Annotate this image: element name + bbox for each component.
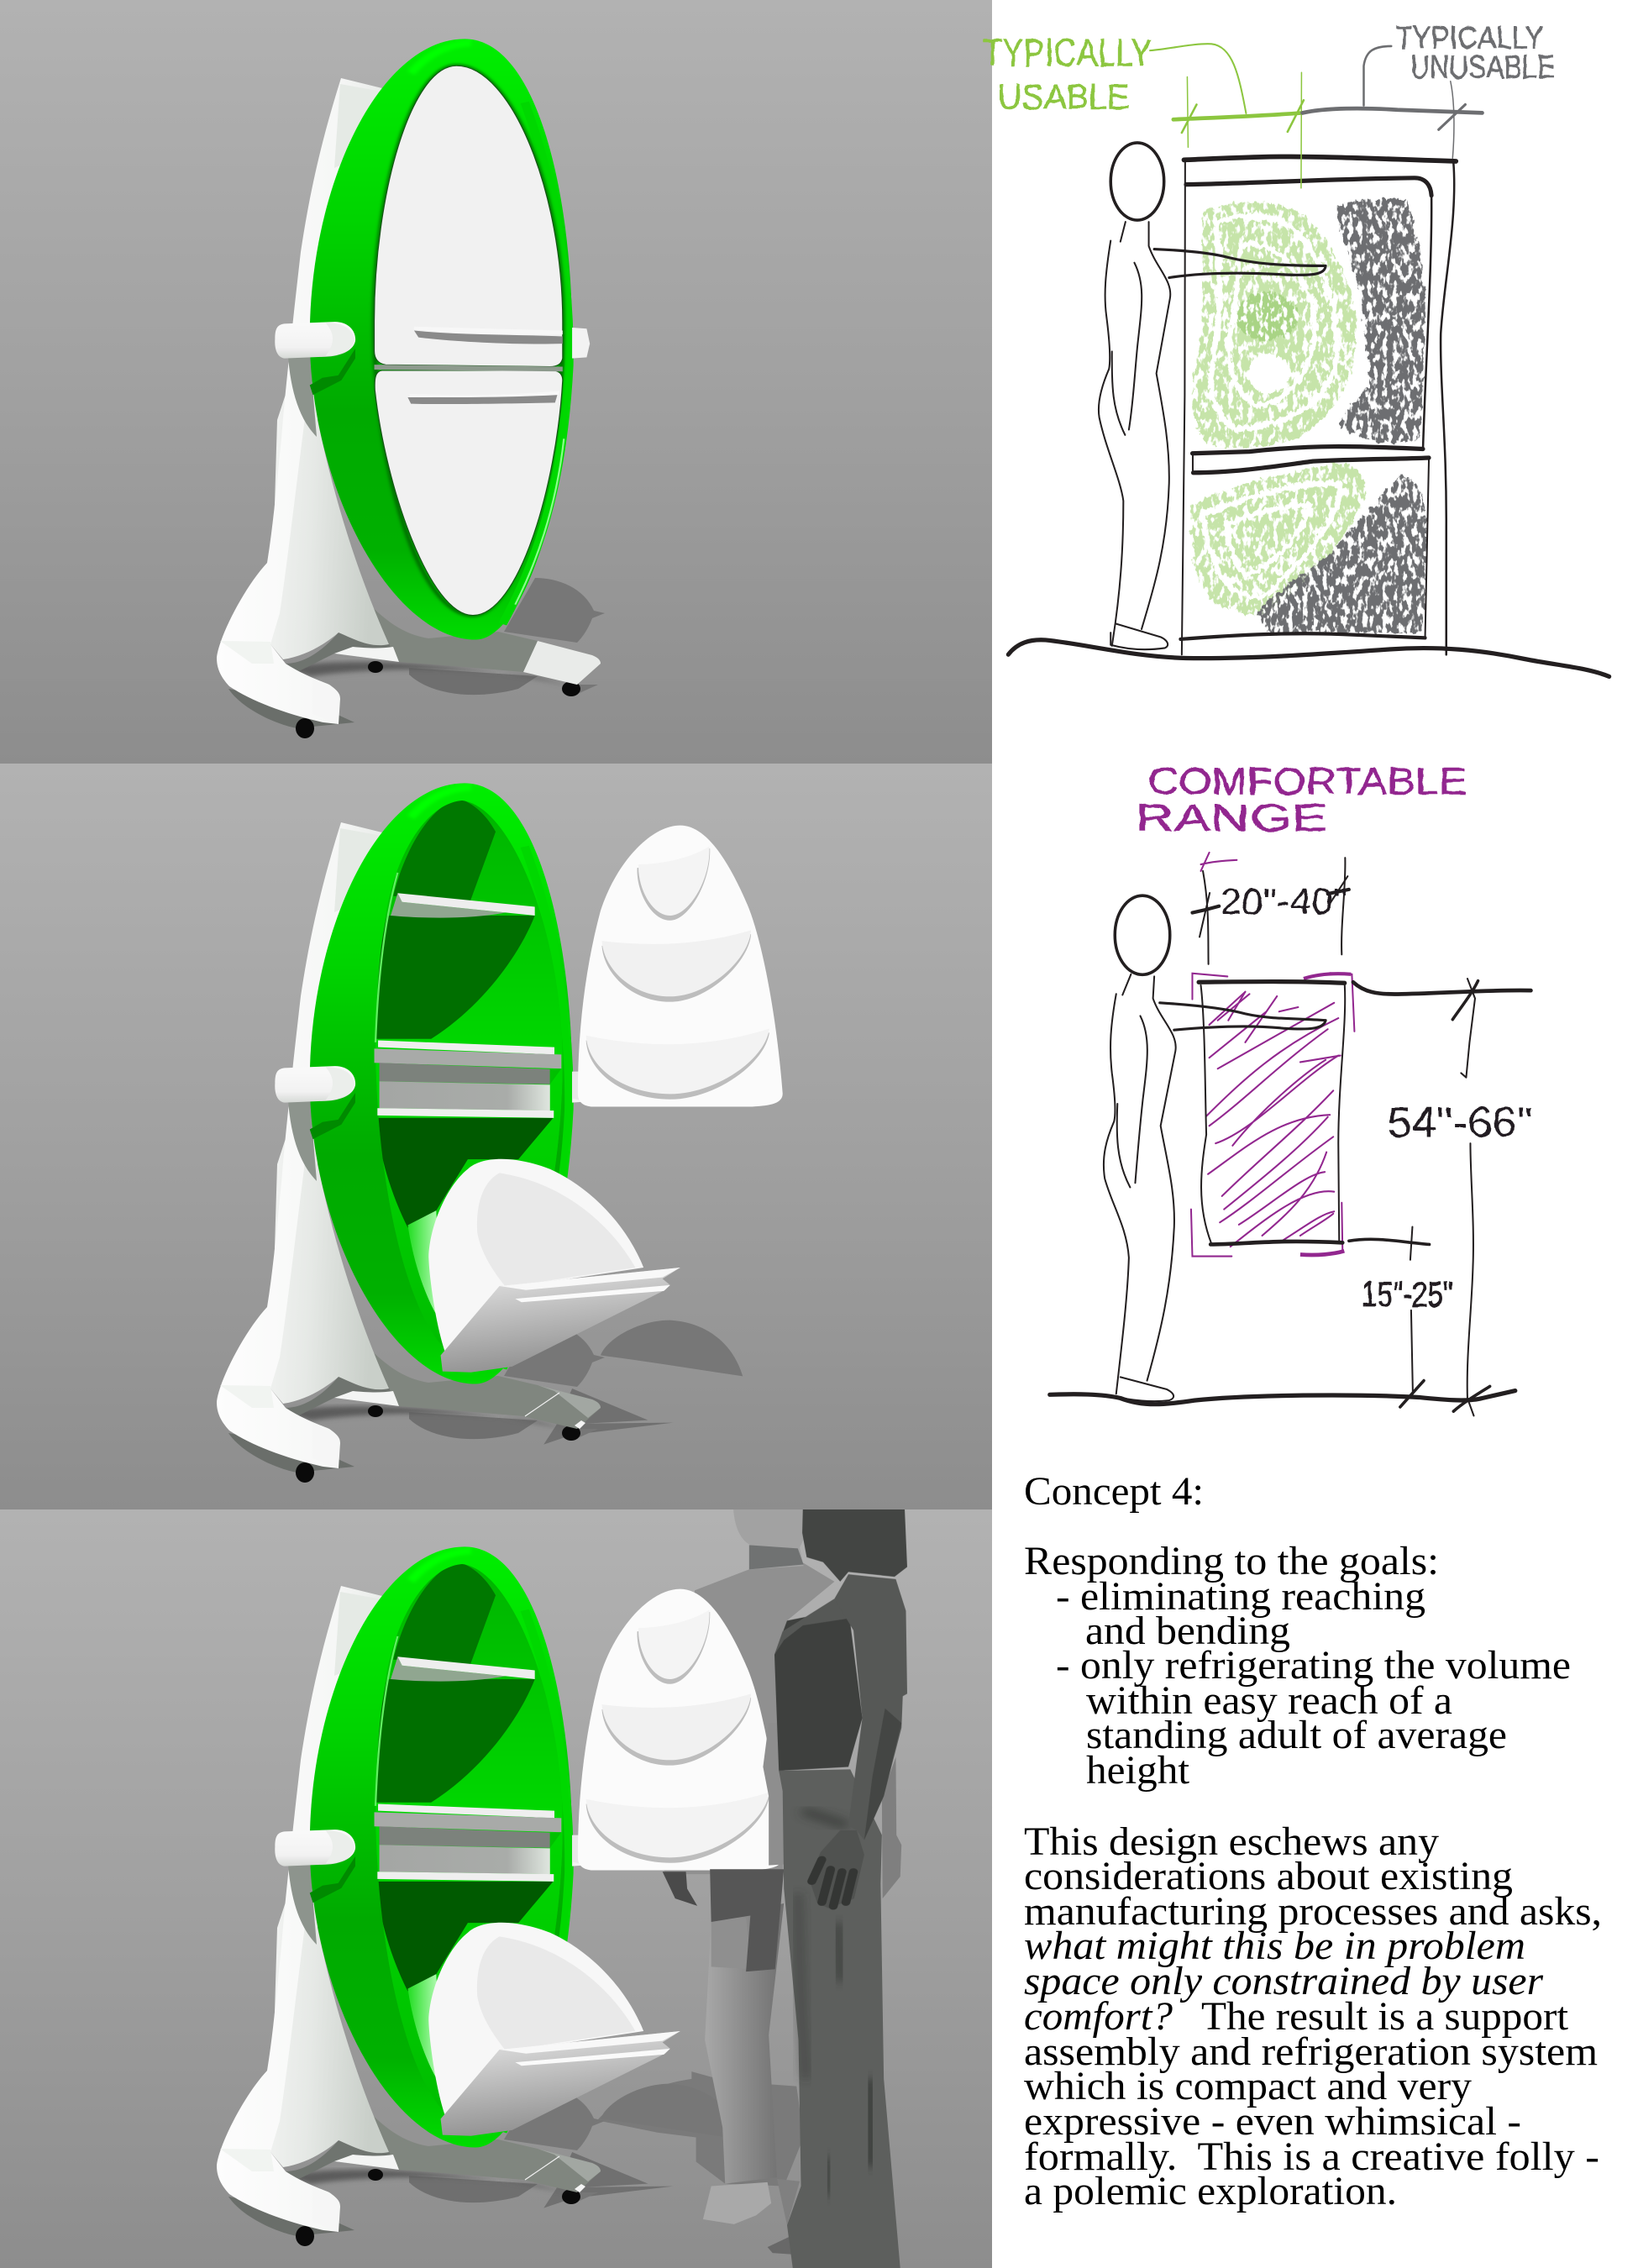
hatching: comfortable volume: [1206, 992, 1341, 1247]
green ring, hub and doors: [275, 39, 590, 639]
open refrigerator model: [217, 1546, 783, 2246]
white door pair: [375, 66, 563, 615]
design paragraph: formally. This is a creative folly -: [1024, 2134, 1599, 2179]
goals list: Responding to the goals:: [1024, 1539, 1439, 1583]
goals list: [1024, 1539, 1571, 1793]
sketch: standing figure: [1099, 143, 1326, 649]
sketch: typically usable vs unusable reach: [983, 20, 1609, 676]
dimension: 20 to 40 inches: 20"-40": [1220, 881, 1347, 922]
dimension: unusable span: [1302, 46, 1483, 158]
human figures: [663, 1509, 907, 2268]
goals list: height: [1086, 1748, 1190, 1793]
label: comfortable range: RANGE: [1135, 797, 1328, 839]
label: typically usable: TYPICALLY: [983, 31, 1152, 75]
label: typically usable: USABLE: [998, 77, 1130, 117]
design paragraph: what might this be in problem: [1024, 1924, 1525, 1968]
closed refrigerator model: [217, 39, 605, 738]
man lower body: [663, 1723, 784, 2224]
design paragraph: [1024, 1819, 1602, 2213]
label: comfortable range: COMFORTABLE: [1148, 761, 1467, 803]
design paragraph: This design eschews any: [1024, 1819, 1439, 1864]
design paragraph: expressive - even whimsical -: [1024, 2099, 1521, 2144]
panel: open concept with human figures: [0, 1509, 992, 2268]
design paragraph: manufacturing processes and asks,: [1024, 1889, 1602, 1934]
scribble: usable zone, green: [1190, 202, 1365, 615]
panel: open concept render: [0, 764, 992, 1509]
sketch: comfortable range dimensions: [1050, 761, 1533, 1415]
scribble: unusable zone, grey: [1256, 198, 1426, 635]
goals list: and bending: [1085, 1609, 1290, 1653]
sketch: standing figure: [1104, 895, 1326, 1401]
design paragraph: space only constrained by user: [1024, 1959, 1543, 2003]
corner brackets: comfortable volume: [1191, 973, 1354, 1257]
goals list: within easy reach of a: [1086, 1678, 1452, 1723]
text block: concept description: [1024, 1469, 1602, 2213]
goals list: - eliminating reaching: [1056, 1574, 1425, 1619]
sketch: storage cabinet outline: [1180, 156, 1456, 654]
dimension: 54 to 66 inches: 54"-66": [1387, 1097, 1533, 1147]
label: typically unusable: TYPICALLY: [1395, 20, 1544, 55]
open refrigerator model with door and drawer: [217, 783, 783, 1483]
sketch: floor line: [1008, 640, 1609, 676]
design paragraph: assembly and refrigeration system: [1024, 2029, 1598, 2074]
panel: closed concept render: [0, 0, 992, 764]
man upper body behind the door: [597, 1509, 834, 2225]
heading: Concept 4:: [1024, 1469, 1204, 1514]
label: comfortable range: [1135, 761, 1467, 839]
sketch: floor and dimension lines: [1050, 853, 1530, 1415]
goals list: - only refrigerating the volume: [1056, 1643, 1571, 1688]
design paragraph: The result is a support: [1201, 1994, 1569, 2039]
label: typically unusable: [1395, 20, 1555, 86]
sketch: volume outline: [1199, 982, 1345, 1244]
woman: [768, 1509, 907, 2268]
design paragraph: which is compact and very: [1024, 2064, 1472, 2108]
dimension: usable span: [1150, 44, 1304, 188]
goals list: standing adult of average: [1086, 1713, 1507, 1757]
door handles: [407, 327, 563, 404]
design paragraph: comfort?: [1024, 1994, 1173, 2039]
design paragraph: considerations about existing: [1024, 1854, 1513, 1898]
label: typically unusable: UNUSABLE: [1410, 50, 1555, 86]
design paragraph: a polemic exploration.: [1024, 2169, 1397, 2213]
support stand with casters: [217, 78, 605, 738]
dimension: 15 to 25 inches: 15"-25": [1362, 1274, 1453, 1315]
label: typically usable: [983, 31, 1152, 117]
